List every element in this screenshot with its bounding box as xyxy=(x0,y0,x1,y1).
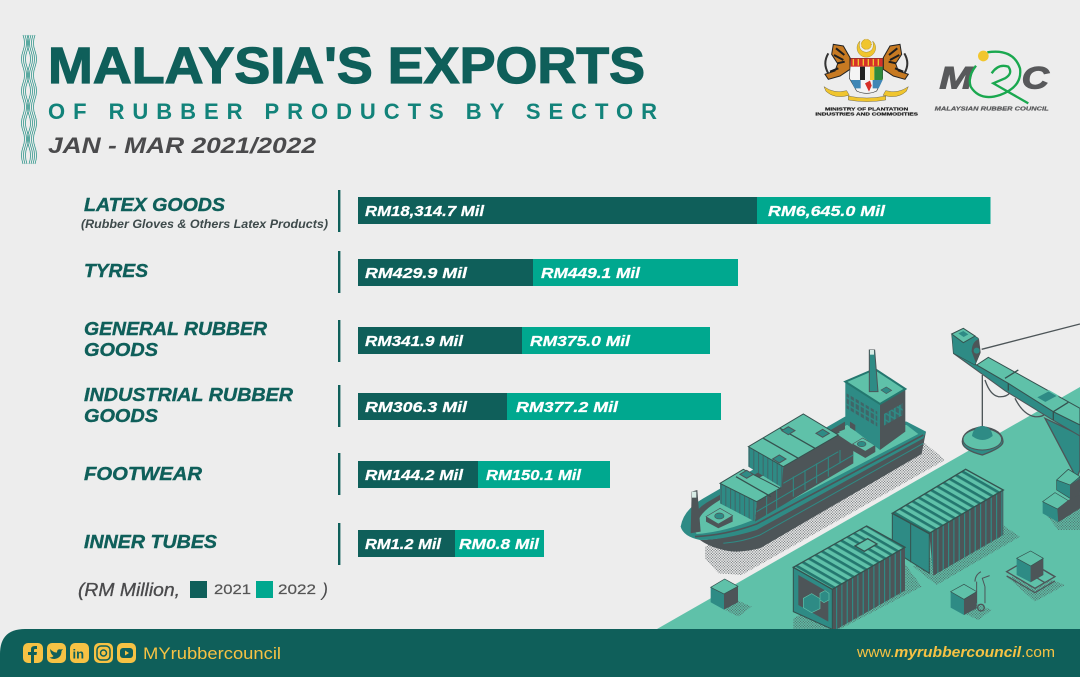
row: general rubber goods xyxy=(84,319,710,362)
row: general rubber goods: GENERAL RUBBER xyxy=(84,319,267,339)
row: industrial rubber goods: RM306.3 Mil xyxy=(365,399,468,416)
ship hull xyxy=(681,417,926,552)
row: footwear: FOOTWEAR xyxy=(84,464,202,484)
decorative wave stripe xyxy=(22,35,36,164)
shipping container, front open xyxy=(793,526,905,629)
row: latex goods: RM18,314.7 Mil xyxy=(365,203,485,220)
illustration: port ground xyxy=(657,387,1080,630)
legend: ) xyxy=(320,580,328,600)
illustration: ship, containers and crane xyxy=(681,350,1065,630)
council name: MALAYSIAN RUBBER COUNCIL xyxy=(935,107,1049,113)
row: inner tubes xyxy=(84,523,544,565)
latex label: LATEX GOODS xyxy=(84,195,225,215)
crane magnet xyxy=(962,426,1003,455)
illustration: crane xyxy=(952,324,1080,530)
row: footwear xyxy=(84,453,610,495)
row: inner tubes: RM0.8 Mil xyxy=(459,536,540,553)
footer bar xyxy=(0,629,1080,677)
social icons xyxy=(23,643,136,663)
subtitle: OF RUBBER PRODUCTS BY SECTOR xyxy=(48,99,657,124)
row: footwear: RM144.2 Mil xyxy=(365,467,464,484)
row: industrial rubber goods: GOODS xyxy=(84,406,158,426)
row: latex goods: (Rubber Gloves & Others Latex Products) xyxy=(81,219,328,231)
row: latex goods: RM6,645.0 Mil xyxy=(768,203,886,220)
crane-side boxes xyxy=(1043,469,1080,530)
row: footwear: RM150.1 Mil xyxy=(486,467,582,484)
row: general rubber goods: RM341.9 Mil xyxy=(365,333,464,350)
pallet with box xyxy=(1007,551,1065,602)
row: industrial rubber goods: INDUSTRIAL RUBBER xyxy=(84,385,293,405)
legend: 2021 xyxy=(214,581,251,597)
legend xyxy=(78,580,328,600)
row: tyres xyxy=(84,251,738,293)
hand truck with box xyxy=(951,572,992,620)
row: inner tubes: RM1.2 Mil xyxy=(365,536,442,553)
logo: malaysian rubber council: M xyxy=(939,60,974,95)
loose box xyxy=(711,579,738,610)
legend: 2022 xyxy=(278,581,316,597)
row: tyres: RM429.9 Mil xyxy=(365,265,468,282)
row: general rubber goods: GOODS xyxy=(84,340,158,360)
ship shadow xyxy=(705,442,945,575)
row: inner tubes: INNER TUBES xyxy=(84,532,217,552)
row: latex goods xyxy=(81,190,990,232)
social handle: MYrubbercouncil xyxy=(143,644,281,663)
row: tyres: TYRES xyxy=(84,261,148,281)
title: MALAYSIA'S EXPORTS xyxy=(48,37,645,94)
row: tyres: RM449.1 Mil xyxy=(541,265,641,282)
crane arm xyxy=(952,328,1080,478)
date range: JAN - MAR 2021/2022 xyxy=(48,133,317,158)
logo: malaysian rubber council: C xyxy=(1022,60,1049,95)
row: industrial rubber goods xyxy=(84,385,721,427)
row: general rubber goods: RM375.0 Mil xyxy=(530,333,631,350)
shipping container, back xyxy=(892,469,1003,576)
near container shadows xyxy=(725,523,1020,630)
legend: (RM Million, xyxy=(78,580,180,600)
ship cargo containers xyxy=(720,414,875,522)
row: industrial rubber goods: RM377.2 Mil xyxy=(516,399,619,416)
logo: ministry coat of arms: INDUSTRIES AND COMMODITIES xyxy=(815,112,919,118)
logo: ministry coat of arms xyxy=(815,39,919,118)
crane cable and hook line xyxy=(982,324,1080,427)
ministry name: MINISTRY OF PLANTATION xyxy=(825,106,909,112)
website: www.myrubbercouncil .com xyxy=(856,644,1055,661)
social icons: in xyxy=(72,646,84,662)
ship bridge tower xyxy=(845,350,905,450)
logo: malaysian rubber council xyxy=(935,51,1049,113)
